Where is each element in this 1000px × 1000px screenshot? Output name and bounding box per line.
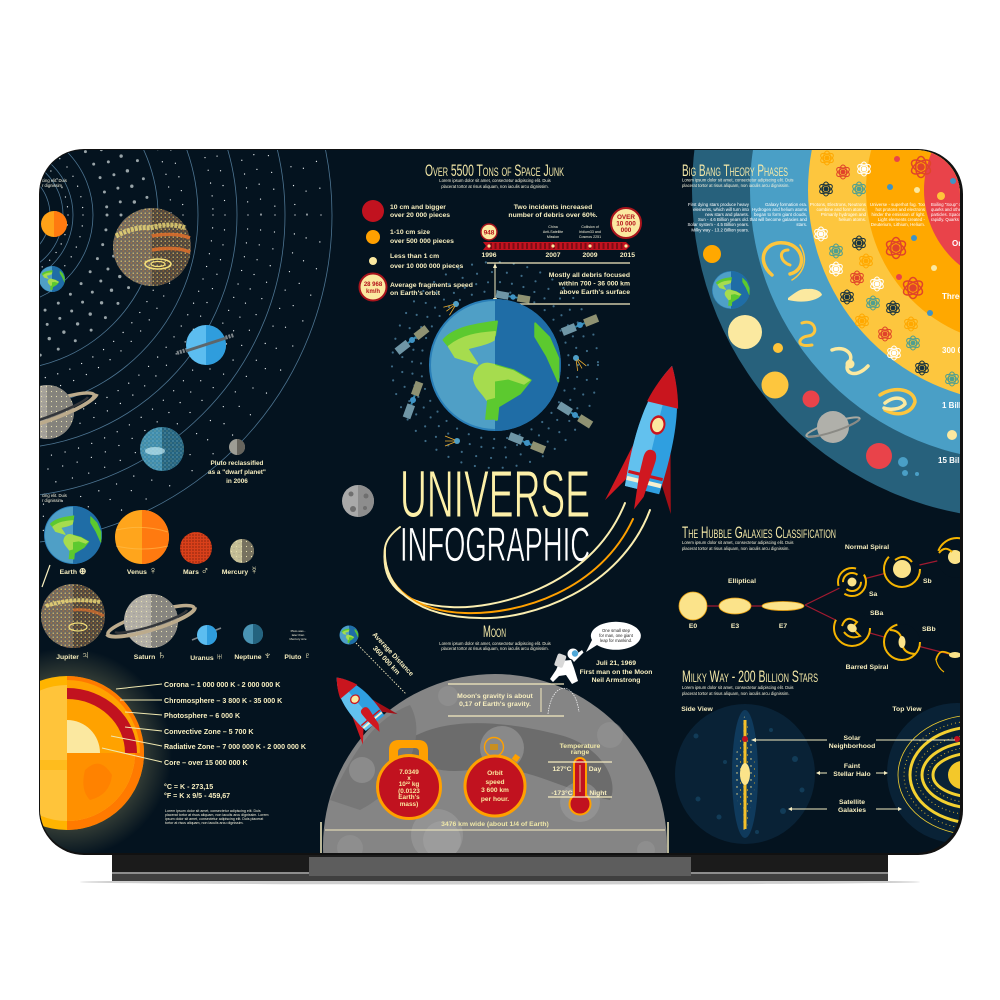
title: universe: UNIVERSE <box>400 457 590 532</box>
distance arrow <box>356 643 406 694</box>
column: fog: hot protons and electrons <box>875 207 926 212</box>
sun layer labels: Radiative Zone – 7 000 000 K - 2 000 000 K <box>164 743 307 751</box>
column: soup: Boiling "Soup" of <box>931 202 963 207</box>
legend: big debris: over 20 000 pieces <box>390 212 450 219</box>
text: incidents: Two incidents increased <box>514 204 592 211</box>
date text: Neil Armstrong <box>592 677 640 684</box>
label: earth: Earth ⊕ <box>60 566 86 576</box>
note: china: China <box>548 225 558 229</box>
heading: The Hubble Galaxies Classification <box>682 523 836 542</box>
distance text: Average Distance <box>371 631 415 678</box>
label: solar neighborhood: Solar <box>844 735 861 742</box>
column: stars: Sun - 4.6 Billion years old. <box>698 217 749 222</box>
text: orbit range: Mostly all debris focused <box>549 272 630 279</box>
band labels: Three minutes <box>942 292 997 301</box>
subheading <box>682 685 793 696</box>
gravity bracket <box>448 684 579 716</box>
note: pluto: Pluto was - <box>291 629 305 633</box>
thermometer: 127°C <box>553 765 572 773</box>
small earth <box>340 626 358 644</box>
planets in outer ring <box>703 245 957 476</box>
column: galaxies: began to form giant clouds, <box>754 212 807 217</box>
note: china: Anti-Satellite <box>543 230 563 234</box>
text: orbit range: within 700 - 36 000 km <box>558 280 630 288</box>
label: satellite galaxies: Galaxies <box>838 807 866 814</box>
heading: Over 5500 Tons of Space Junk <box>425 161 564 180</box>
subheading: placerat tortor at risus aliquam, non iaculis arcu dignissim. <box>682 546 790 551</box>
planet: venus <box>115 510 169 564</box>
astronaut <box>550 648 584 684</box>
column: stars: First dying stars produce heavy <box>688 202 750 207</box>
text: orbit range <box>549 272 630 296</box>
date text: First man on the Moon <box>580 669 652 676</box>
row: terrestrial planets <box>42 506 258 587</box>
subheading: Lorem ipsum dolor sit amet, consectetur adipiscing elit. Duis <box>439 178 551 183</box>
note: pluto: later than <box>292 633 305 637</box>
leader lines <box>102 684 162 762</box>
subheading <box>682 540 793 551</box>
badge: over 10 000 000 <box>611 208 641 238</box>
badge: over 10 000 000: OVER <box>617 214 635 221</box>
text: pluto reclassified <box>208 460 266 483</box>
label: stellar halo <box>816 763 888 778</box>
column: galaxies: Galaxy formation era. <box>765 202 807 207</box>
rocket <box>605 358 705 518</box>
timeline <box>481 242 635 259</box>
column: fog <box>870 202 926 227</box>
sun layer labels: Photosphere – 6 000 K <box>164 712 241 720</box>
gravity text <box>457 693 534 708</box>
legend: small debris: over 10 000 000 pieces <box>390 263 464 270</box>
thermometer: range <box>571 749 589 756</box>
lorem ipsum: Lorem ipsum dolor sit amet, consectetur adipiscing elit. Duis <box>165 809 261 813</box>
kettlebell mass: 10²² kg <box>399 781 419 788</box>
stopwatch orbit speed: per hour. <box>481 796 509 803</box>
hubble labels: Barred Spiral <box>846 664 888 671</box>
badge: over 10 000 000: 10 000 <box>616 220 636 228</box>
column: stars: new stars and planets. <box>705 212 749 217</box>
label: uranus: Uranus ♅ <box>190 651 224 663</box>
date text: Juli 21, 1969 <box>596 660 636 667</box>
subheading: placerat tortor at risus aliquam, non iaculis arcu dignissim. <box>682 691 790 696</box>
column: stars: Milky way - 13.2 Billion years. <box>691 228 749 232</box>
text: orbit range: above Earth's surface <box>560 289 630 296</box>
text block: planets intro: cing elit. Duis <box>42 493 67 498</box>
legend: big debris: 10 cm and bigger <box>390 204 446 211</box>
legend: small debris: Less than 1 cm <box>390 253 439 260</box>
planet: uranus <box>192 625 221 645</box>
band labels: 300 000 years <box>942 346 995 355</box>
label: stellar halo: Stellar Halo <box>833 771 871 778</box>
legend: big debris <box>362 200 450 222</box>
label: side view: Side View <box>681 706 714 713</box>
moon subheading <box>439 641 551 651</box>
note: pluto: Mercury size <box>289 637 307 641</box>
stopwatch orbit speed: speed <box>485 779 505 786</box>
temperature formulas: °F = K x 9/5 - 459,67 <box>164 792 230 800</box>
sun glow <box>40 653 167 852</box>
kettlebell mass: Earth's <box>398 794 420 801</box>
text block: solar system intro: cing elit. Duis <box>42 178 67 183</box>
planet: neptune <box>243 624 263 644</box>
sun layer labels: Core – over 15 000 000 K <box>164 759 248 767</box>
panel: moon <box>319 622 668 1000</box>
column: atoms: helium atoms. <box>839 217 866 222</box>
lorem ipsum <box>165 809 268 825</box>
badge: speed: 28 968 <box>364 282 383 288</box>
planet: saturn <box>105 594 197 648</box>
temperature formulas: °C = K - 273,15 <box>164 783 213 791</box>
top view galaxy <box>887 703 1000 843</box>
orbit planet: saturn <box>40 385 99 439</box>
column: stars: elements, which will turn into <box>693 207 750 212</box>
subheading: Lorem ipsum dolor sit amet, consectetur adipiscing elit. Duis <box>682 540 793 545</box>
decorative saturn comet line <box>42 565 50 587</box>
timeline: 2009 <box>582 252 598 259</box>
panel: milky way <box>675 667 1000 844</box>
subheading <box>439 178 551 189</box>
kettlebell mass: mass) <box>400 801 418 808</box>
hubble labels <box>689 544 936 671</box>
hubble labels: E3 <box>731 623 739 630</box>
sun layer labels: Convective Zone – 5 700 K <box>164 728 254 736</box>
column: stars <box>688 202 750 232</box>
branches <box>693 558 953 655</box>
orbit planet: jupiter <box>113 208 191 286</box>
legend: speed text: Average fragments speed <box>390 282 473 289</box>
band labels: 1 Billion years <box>942 401 997 410</box>
column: stars: Solar system - 4.5 Billion years. <box>688 222 749 227</box>
heading: moon: Moon <box>483 622 506 641</box>
globe: earth <box>429 299 561 431</box>
planet: jupiter <box>41 584 105 648</box>
sun layer labels: Chromosphere – 3 800 K - 35 000 K <box>164 697 283 705</box>
note: collision <box>579 225 601 239</box>
band labels: 15 Billion years <box>938 456 997 465</box>
legend: medium debris: over 500 000 pieces <box>390 238 454 245</box>
small moon <box>342 485 374 517</box>
subheading: Lorem ipsum dolor sit amet, consectetur adipiscing elit. Duis <box>682 685 793 690</box>
text block: solar system intro: r dignissim. <box>42 183 63 188</box>
spiral galaxies <box>834 538 977 672</box>
speech bubble: leap for mankind. <box>600 638 632 643</box>
side view galaxy <box>675 704 815 844</box>
panel: sun structure <box>40 653 306 852</box>
orbit range bracket <box>487 263 630 304</box>
orbit planet: earth <box>39 266 65 292</box>
subheading <box>682 178 793 188</box>
text: pluto reclassified: in 2006 <box>226 478 248 485</box>
hubble labels: Sa <box>869 591 878 598</box>
planet: earth <box>44 506 102 564</box>
moon surface <box>323 674 667 1000</box>
sun layer labels <box>164 681 307 767</box>
atoms <box>813 151 960 386</box>
stopwatch orbit speed <box>465 738 525 816</box>
column: fog: Light elements created - <box>878 217 926 222</box>
thermometer <box>548 743 612 814</box>
small rocket <box>319 663 399 745</box>
thermometer: -173°C <box>551 789 573 797</box>
label: solar neighborhood: Neighborhood <box>829 743 875 750</box>
legend: speed text <box>390 282 473 297</box>
thermometer: Night <box>589 790 607 797</box>
text block: solar system intro <box>42 178 67 188</box>
note: china: Mission <box>547 235 559 239</box>
note: collision: Iridium33 and <box>579 230 601 234</box>
distance text: 360 000 km <box>371 645 401 676</box>
hubble labels: Elliptical <box>728 578 756 585</box>
label: stellar halo: Faint <box>844 763 861 770</box>
column: atoms: Primarily hydrogen and <box>821 212 867 217</box>
timeline: 2015 <box>620 252 635 259</box>
kettlebell mass: (0.0123 <box>398 788 420 795</box>
speech bubble <box>586 622 641 652</box>
label: venus: Venus ♀ <box>127 565 157 577</box>
stopwatch orbit speed: 3 600 km <box>481 787 509 794</box>
orbit planet: neptune <box>140 427 184 471</box>
note: pluto <box>290 630 306 640</box>
label: solar neighborhood <box>751 735 955 750</box>
hubble labels: Normal Spiral <box>845 544 889 551</box>
label: top view: Top View <box>892 706 922 713</box>
label: pluto: Pluto ♇ <box>284 650 312 662</box>
planet: mercury <box>230 539 254 563</box>
subheading: placerat tortor at risus aliquam, non iaculis arcu dignissim. <box>682 183 790 188</box>
concentric rings <box>692 0 1000 519</box>
hubble labels: SBa <box>870 610 883 617</box>
badge: 948 <box>481 224 497 240</box>
legend: small debris <box>369 253 464 270</box>
speech bubble: One small step <box>602 628 631 633</box>
badge: over 10 000 000: 000 <box>621 227 632 234</box>
column: atoms: Protons, Electrons, Neutrons <box>810 202 867 207</box>
hubble labels: E7 <box>779 623 787 630</box>
stopwatch orbit speed: Orbit <box>487 770 504 777</box>
label: satellite galaxies <box>788 799 902 814</box>
moon subheading: placerat tortor at risus aliquam, non iaculis arcu dignissim. <box>441 646 549 651</box>
panel: big bang <box>682 0 1000 519</box>
row: gas planets <box>41 584 312 663</box>
column: soup: particles. Space <box>931 212 961 217</box>
speech bubble: for man, one giant <box>599 633 634 638</box>
label: satellite galaxies: Satellite <box>839 799 865 806</box>
device shadow <box>80 880 920 884</box>
thermometer: Day <box>589 766 601 773</box>
swoosh trails <box>384 503 650 618</box>
column: galaxies: that will become galaxies and <box>750 217 808 222</box>
heading: Milky Way - 200 Billion Stars <box>682 667 818 686</box>
column: fog: hinder the emission of light. <box>872 212 925 217</box>
lorem ipsum: ipsum dolor sit amet, consectetur adipiscing elit. Duis placerat <box>165 817 263 821</box>
moon width arrow <box>321 822 668 853</box>
elliptical galaxies <box>679 592 804 620</box>
legend: medium debris <box>366 229 454 245</box>
main title <box>400 457 590 572</box>
column: soup <box>931 202 968 222</box>
label: mars: Mars ♂ <box>183 565 209 577</box>
subheading: Lorem ipsum dolor sit amet, consectetur adipiscing elit. Duis <box>682 178 793 182</box>
kettlebell mass: x <box>407 775 411 782</box>
column: galaxies <box>750 202 808 227</box>
hubble labels: SBb <box>922 626 936 633</box>
column: galaxies: Hydrogen and helium atoms <box>752 207 808 212</box>
panel: hubble classification <box>679 523 977 672</box>
badge: 948: 948 <box>484 230 495 236</box>
note: collision: Cosmos 2251 <box>579 235 601 239</box>
column: atoms <box>810 202 867 222</box>
satellites <box>395 290 599 454</box>
timeline: 1996 <box>481 252 497 259</box>
lorem ipsum: placerat tortor at risus aliquam, non iaculis arcu dignissim. Lorem <box>165 813 268 817</box>
sun cross section <box>40 676 144 830</box>
orbit planet: pluto <box>229 439 245 455</box>
label: jupiter: Jupiter ♃ <box>56 648 90 662</box>
column: fog: Deuterium, Lithium, Helium. <box>871 222 925 227</box>
orbit planet: venus <box>41 211 67 237</box>
badge: speed: km/h <box>366 289 380 295</box>
band labels: One second <box>952 239 998 248</box>
legend: speed text: on Earth's orbit <box>390 290 441 297</box>
heading: Big Bang Theory Phases <box>682 161 788 180</box>
band labels <box>938 239 998 465</box>
panel: solar system orbits <box>40 150 332 542</box>
text block: planets intro <box>42 493 67 503</box>
date text <box>580 660 652 684</box>
timeline: 2007 <box>545 252 561 259</box>
kettlebell mass: 7.0349 <box>399 769 419 776</box>
sun layer labels: Corona – 1 000 000 K - 2 000 000 K <box>164 681 281 689</box>
tablet bezel <box>39 149 963 855</box>
column: fog: Universe - superhot fog. Too <box>870 202 926 207</box>
keyboard base <box>112 853 888 881</box>
text: incidents <box>508 204 598 219</box>
label: saturn: Saturn ♄ <box>134 648 166 662</box>
note: china <box>543 225 563 239</box>
column: soup: rapidly. Quarks and <box>931 217 968 222</box>
text: pluto reclassified: as a "dwarf planet" <box>208 469 266 476</box>
orbit planet: uranus <box>177 325 234 365</box>
text: incidents: number of debris over 60%. <box>508 212 598 219</box>
planet: mars <box>180 532 212 564</box>
screen <box>40 150 960 853</box>
thermometer: Temperature <box>560 743 601 750</box>
text: pluto reclassified: Pluto reclassified <box>211 460 264 467</box>
legend: medium debris: 1-10 cm size <box>390 229 430 236</box>
lorem ipsum: tortor at risus aliquam, non iaculis arcu dignissim. <box>165 821 244 825</box>
moon subheading: Lorem ipsum dolor sit amet, consectetur adipiscing elit. Duis <box>439 641 551 646</box>
debris dots <box>392 262 598 468</box>
hubble labels: Sb <box>923 578 932 585</box>
column: galaxies: stars. <box>796 222 807 227</box>
column: soup: quarks and other <box>931 207 963 212</box>
note: collision: Collision of <box>581 225 599 229</box>
label: mercury: Mercury ☿ <box>222 565 258 577</box>
text block: planets intro: r dignissim. <box>42 498 63 503</box>
badge: speed <box>360 274 386 300</box>
moon width label: 3476 km wide (about 1/4 of Earth) <box>441 821 549 828</box>
gravity text: 0,17 of Earth's gravity. <box>459 701 531 708</box>
hubble labels: E0 <box>689 623 697 630</box>
subheading: placerat tortor at risus aliquam, non iaculis arcu dignissim. <box>441 184 549 189</box>
kettlebell mass <box>378 740 440 818</box>
panel: space junk <box>360 161 641 468</box>
gravity text: Moon's gravity is about <box>457 693 534 700</box>
column: atoms: combine and form atoms. <box>816 207 866 212</box>
label: neptune: Neptune ♆ <box>234 650 272 662</box>
temperature formulas <box>164 783 230 800</box>
particles <box>887 156 956 316</box>
title: infographic: INFOGRAPHIC <box>400 519 590 572</box>
galaxies in blue ring <box>763 243 915 414</box>
